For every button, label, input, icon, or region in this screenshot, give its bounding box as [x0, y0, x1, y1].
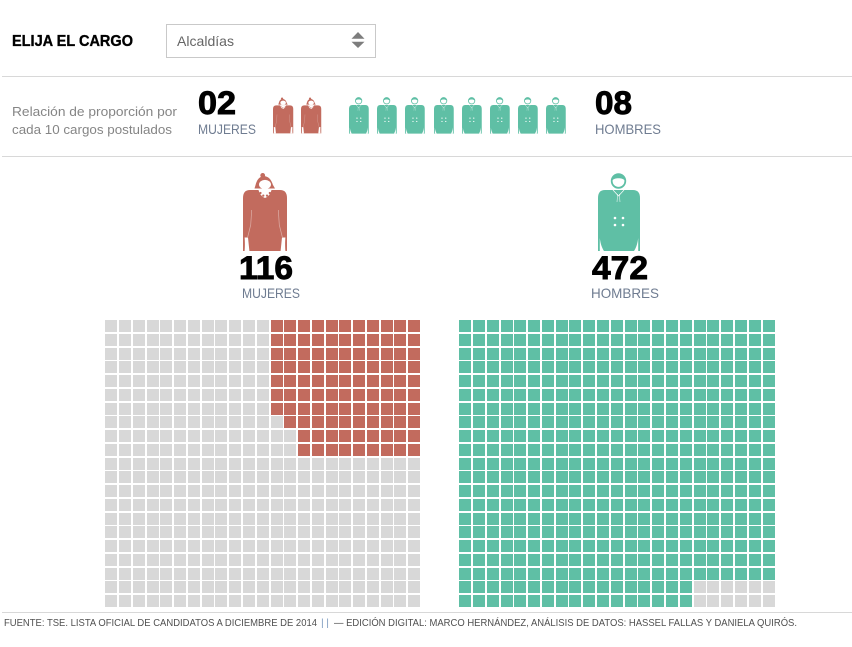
stat: 472 hombres: HOMBRES: [591, 285, 659, 301]
stat: 116 mujeres: 116: [239, 250, 293, 286]
footer: source and credits: | |: [321, 617, 329, 629]
dropdown selector: Alcaldías: [177, 33, 234, 49]
text: proportion description: Relación de proporción por: [12, 104, 178, 119]
text: proportion description: cada 10 cargos postulados: [12, 122, 173, 137]
stat: 08 hombres: [595, 85, 661, 137]
stat: 02 mujeres: [198, 85, 256, 137]
footer: source and credits: [4, 616, 797, 629]
stat: 02 mujeres: 02: [198, 85, 236, 121]
icons: 8 men: [349, 98, 566, 134]
dropdown selector: [166, 24, 376, 58]
footer: source and credits: FUENTE: TSE. LISTA OFICIAL DE CANDIDATOS A DICIEMBRE DE 2014: [4, 617, 317, 629]
icons: 2 women: [273, 98, 321, 133]
stat: 116 mujeres: [239, 250, 300, 301]
text: proportion description: [12, 104, 178, 137]
icon: large woman: [243, 173, 287, 251]
stat: 08 hombres: HOMBRES: [595, 121, 661, 137]
waffle chart: mujeres: [105, 320, 420, 607]
waffle chart: hombres: [459, 320, 775, 607]
icon: large man: [598, 174, 640, 251]
stat: 472 hombres: [591, 250, 659, 301]
stat: 02 mujeres: MUJERES: [198, 121, 256, 137]
stat: 116 mujeres: MUJERES: [242, 285, 300, 301]
heading: elija el cargo: ELIJA EL CARGO: [12, 33, 133, 50]
footer: source and credits: — EDICIÓN DIGITAL: MARCO HERNÁNDEZ, ANÁLISIS DE DATOS: HASSEL FALLAS Y DANIELA QUIRÓS.: [334, 616, 797, 629]
stat: 472 hombres: 472: [592, 250, 648, 286]
stat: 08 hombres: 08: [595, 85, 632, 121]
